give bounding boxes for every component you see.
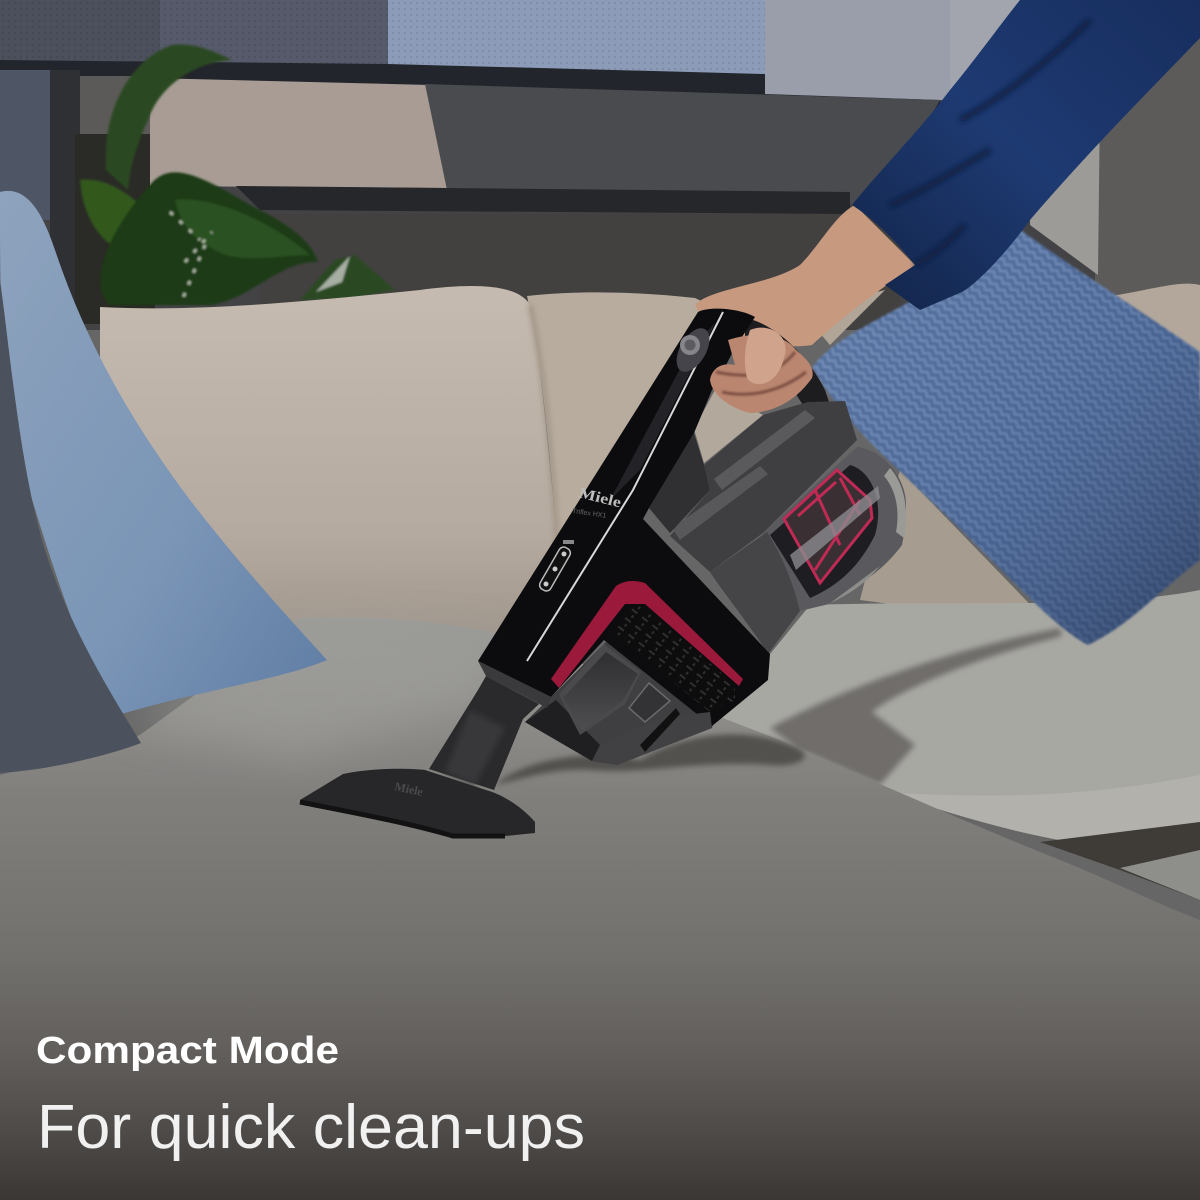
red accent stripe [551, 581, 743, 688]
bottom text block [36, 1030, 585, 1162]
dark grey pillow [0, 280, 141, 773]
handle [745, 318, 829, 414]
window through handle [694, 388, 763, 463]
fingers [710, 335, 813, 413]
hand back [695, 205, 915, 346]
upper cylinder highlight [714, 410, 815, 490]
power button [670, 323, 716, 377]
blue herringbone pillow [812, 222, 1200, 645]
cushion crease [530, 305, 560, 575]
plant [80, 44, 395, 305]
lower cylinder highlight [672, 466, 768, 540]
glossy sheen [610, 322, 716, 500]
sofa back cushion left [100, 286, 562, 640]
mode buttons [538, 540, 574, 593]
vacuum cleaner [300, 205, 915, 836]
back right cushions [800, 284, 1200, 625]
heading: Compact Mode: Compact Mode [36, 1030, 339, 1072]
thumb [745, 328, 786, 384]
main seat cushion [0, 617, 1200, 1200]
brand label: Miele [577, 485, 623, 511]
brush edge [300, 802, 505, 836]
right seat cushion [700, 590, 1200, 900]
ribbed base [525, 700, 600, 761]
body collar [478, 661, 551, 708]
sofa back cushion centre [490, 292, 720, 640]
grey bin [525, 640, 715, 765]
seat light shading [120, 625, 500, 760]
crevice brush [300, 769, 535, 836]
light blue pillow [0, 191, 327, 716]
shirt sleeve [852, 0, 1200, 310]
sleeve folds [890, 20, 1090, 265]
clear dust bin [763, 447, 906, 616]
dust door [559, 644, 712, 765]
motor body [670, 401, 857, 572]
model label: Triflex HX1 [572, 508, 607, 520]
shadow below vacuum [495, 734, 805, 785]
rear band [710, 532, 800, 654]
background wall [0, 0, 1200, 330]
nozzle tube [429, 676, 539, 790]
subheading: For quick clean-ups: For quick clean-ups [37, 1093, 585, 1162]
neck under arm [649, 433, 710, 533]
brush label: Miele [393, 779, 425, 799]
black body [478, 309, 770, 726]
finger shading [716, 352, 806, 394]
body edge highlight [527, 312, 723, 661]
vent grille [612, 606, 735, 712]
tube highlight [445, 710, 505, 785]
